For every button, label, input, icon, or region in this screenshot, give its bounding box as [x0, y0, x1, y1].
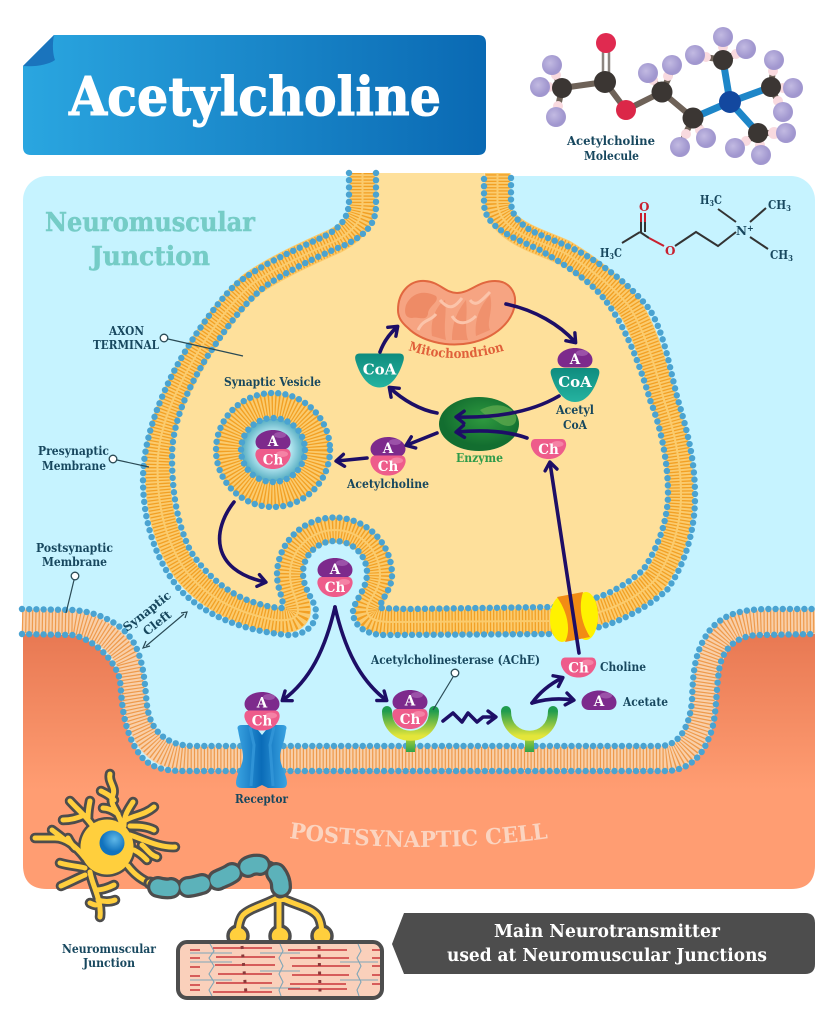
- coa: [355, 354, 404, 388]
- choline: Ch: [568, 660, 589, 676]
- acetate: Acetate: [622, 695, 668, 709]
- enzyme cup with acetylcholine: [387, 690, 434, 752]
- choline transporter channel: [550, 592, 598, 642]
- molecule caption: [566, 134, 655, 163]
- acetylcholine released in cleft: Ch: [325, 580, 345, 596]
- label: postsynaptic membrane: Membrane: [42, 555, 107, 569]
- structural formula: O: [639, 200, 649, 214]
- neuron: [35, 774, 332, 946]
- label: presynaptic membrane: [38, 444, 149, 473]
- postsynaptic cell body: [23, 634, 815, 889]
- molecule caption: Molecule: [584, 149, 639, 163]
- acetyl coa: [551, 348, 599, 402]
- choline in terminal: Ch: [538, 442, 559, 458]
- synaptic vesicle: Ch: [263, 452, 283, 468]
- synaptic vesicle: A: [267, 434, 279, 450]
- label: postsynaptic membrane: Postsynaptic: [36, 541, 113, 555]
- text: Mitochondrion: [408, 341, 504, 358]
- presynaptic membrane: [143, 173, 695, 635]
- label: acetylcholinesterase: [370, 653, 540, 710]
- structural formula: N: [736, 224, 747, 238]
- label: neuromuscular junction small: [62, 942, 157, 970]
- acetate: A: [593, 694, 605, 710]
- label: acetyl coa: Acetyl: [555, 403, 594, 417]
- label: axon terminal: TERMINAL: [93, 338, 159, 352]
- label: axon terminal: AXON: [108, 324, 144, 338]
- label: acetyl coa: CoA: [563, 418, 588, 432]
- label: neuromuscular junction small: Junction: [82, 956, 135, 970]
- acetyl coa: CoA: [558, 373, 592, 391]
- acetate: [582, 690, 668, 710]
- callout: used at Neuromuscular Junctions: [447, 946, 767, 966]
- label: acetylcholine: Acetylcholine: [346, 477, 429, 491]
- label: synaptic vesicle: Synaptic Vesicle: [224, 375, 321, 389]
- label: postsynaptic membrane: [36, 541, 113, 613]
- icon: nucleus: [100, 830, 124, 856]
- structural formula: CH: [768, 198, 789, 212]
- label: synaptic cleft: Cleft: [140, 607, 174, 638]
- label: mitochondrion: [408, 350, 506, 358]
- receptor: [236, 725, 287, 788]
- enzyme cup with acetylcholine: Ch: [400, 712, 420, 728]
- acetyl coa: A: [569, 352, 581, 368]
- structural formula: 3: [786, 203, 791, 213]
- structural formula: [600, 193, 793, 263]
- synaptic vesicle: [216, 393, 330, 507]
- acetylcholine released in cleft: A: [329, 562, 341, 578]
- acetylcholine in terminal: Ch: [378, 459, 398, 475]
- heading: neuromuscular junction: Neuromuscular: [45, 208, 255, 238]
- molecule model: [530, 27, 803, 165]
- axon with myelin segments: [150, 865, 281, 892]
- postsynaptic membrane: [22, 609, 815, 771]
- label: presynaptic membrane: Presynaptic: [38, 444, 109, 458]
- callout: Main Neurotransmitter: [494, 922, 721, 942]
- label: presynaptic membrane: Membrane: [42, 459, 106, 473]
- coa: CoA: [363, 360, 397, 378]
- enzyme: [439, 397, 519, 451]
- postsynaptic cell label: [289, 838, 550, 847]
- title banner: [23, 35, 486, 155]
- structural formula: H: [600, 246, 611, 260]
- title: Acetylcholine: [68, 66, 441, 128]
- arrows: [220, 304, 579, 722]
- acetylcholine on receptor: [244, 692, 280, 730]
- enzyme cup with acetylcholine: A: [404, 694, 416, 710]
- label: receptor: Receptor: [235, 792, 289, 806]
- acetylcholine in terminal: [370, 437, 406, 476]
- structural formula: 3: [788, 253, 793, 263]
- structural formula: O: [665, 244, 675, 258]
- muscle fibre: [178, 942, 382, 998]
- label: acetyl coa: [555, 403, 594, 432]
- axon terminal cytoplasm: [172, 173, 668, 609]
- structural formula: CH: [770, 248, 791, 262]
- label: neuromuscular junction small: Neuromuscular: [62, 942, 157, 956]
- structural formula: H: [700, 193, 711, 207]
- structural formula: 3: [709, 198, 714, 208]
- choline: Choline: [600, 660, 646, 674]
- heading: neuromuscular junction: Junction: [89, 242, 210, 272]
- structural formula: C: [614, 246, 622, 260]
- label: axon terminal: [93, 324, 243, 356]
- structural formula: 3: [609, 251, 614, 261]
- label: acetylcholinesterase: Acetylcholinesterase (AChE): [370, 653, 540, 667]
- choline in terminal: [531, 439, 566, 459]
- structural formula: C: [714, 193, 722, 207]
- callout: [392, 913, 815, 974]
- choline: [561, 658, 646, 678]
- molecule caption: Acetylcholine: [566, 134, 655, 148]
- enzyme cup empty: [506, 711, 553, 752]
- heading: neuromuscular junction: [45, 208, 255, 272]
- text: POSTSYNAPTIC CELL: [290, 822, 548, 847]
- acetylcholine released in cleft: [317, 558, 353, 597]
- acetylcholine in terminal: A: [382, 441, 394, 457]
- label: synaptic cleft: [120, 588, 187, 648]
- icon: folded corner: [23, 35, 55, 66]
- panel: neuromuscular junction background: [23, 176, 815, 889]
- label: synaptic cleft: Synaptic: [120, 588, 174, 634]
- label: enzyme: Enzyme: [456, 450, 503, 465]
- structural formula: +: [747, 223, 754, 233]
- mitochondrion: [398, 281, 515, 345]
- acetylcholine on receptor: A: [256, 696, 268, 712]
- acetylcholine on receptor: Ch: [252, 714, 272, 730]
